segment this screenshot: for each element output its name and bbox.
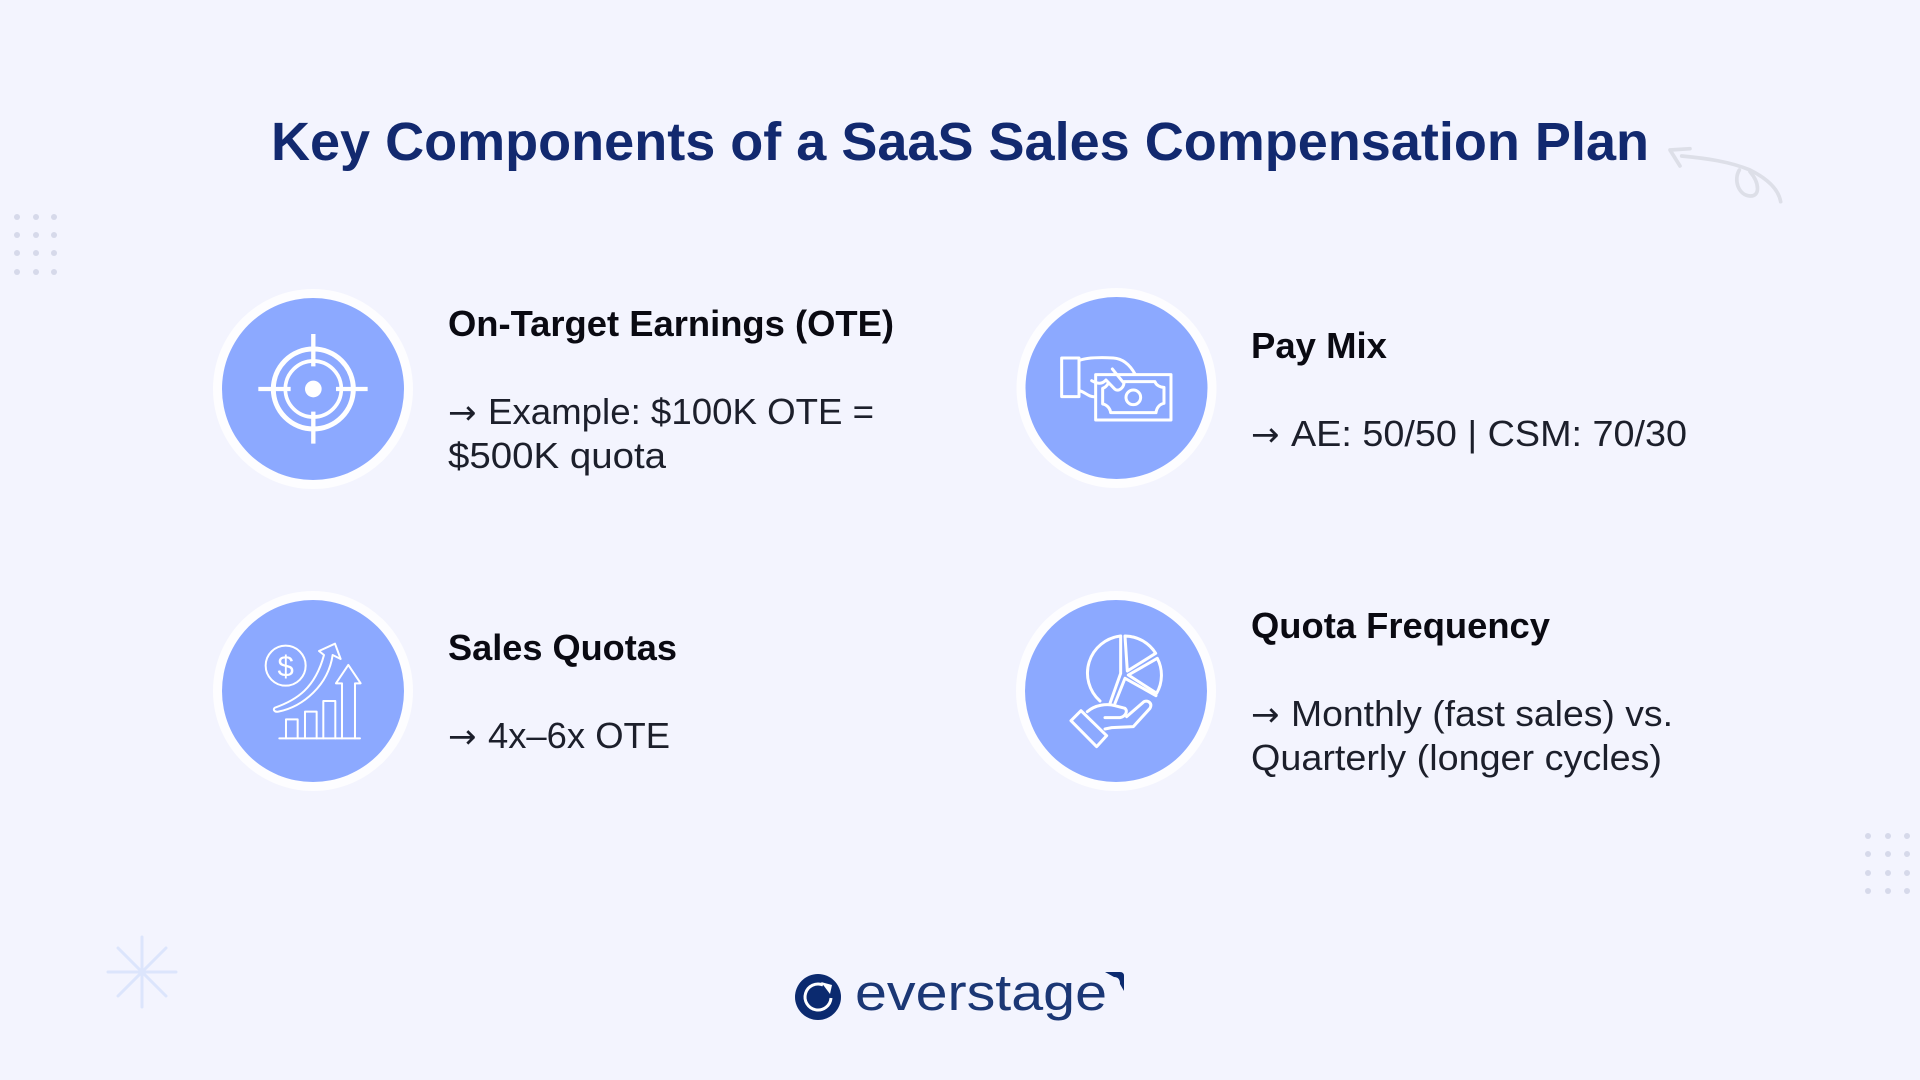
icon: hand with money	[1016, 288, 1216, 488]
text: quota multiple: 4x–6x OTE	[488, 715, 670, 756]
logo corner mark	[1105, 972, 1124, 991]
text: quota multiple: →	[448, 717, 476, 757]
icon: hand holding pie chart	[1016, 591, 1216, 791]
logo: everstage	[795, 964, 1124, 1021]
icon: growth chart: $	[278, 650, 294, 683]
text: OTE example: $500K quota	[448, 435, 667, 476]
heading: OTE: On-Target Earnings (OTE)	[448, 303, 894, 344]
decorative dot grid left	[14, 214, 57, 275]
card: pay mix	[1016, 288, 1687, 488]
title: Key Components of a SaaS Sales Compensation Plan	[271, 112, 1649, 172]
card: quota frequency	[1016, 591, 1673, 791]
text: OTE example: →	[448, 393, 476, 433]
card: sales quotas	[213, 591, 677, 791]
text: pay mix ratios: AE: 50/50 | CSM: 70/30	[1291, 413, 1687, 454]
decorative dot grid right	[1865, 833, 1910, 894]
logo wordmark: everstage	[855, 964, 1107, 1021]
heading: pay mix: Pay Mix	[1251, 325, 1387, 366]
decorative squiggle arrow	[1670, 149, 1781, 202]
card: on-target earnings	[213, 289, 894, 489]
text: frequency options: Monthly (fast sales) vs.	[1291, 693, 1673, 734]
decorative asterisk star	[108, 937, 176, 1007]
text: pay mix ratios: →	[1251, 415, 1280, 455]
icon: target	[213, 289, 413, 489]
icon: logo mark	[795, 974, 841, 1020]
icon: growth chart	[213, 591, 413, 791]
text: frequency options: →	[1251, 695, 1280, 735]
heading: quota frequency: Quota Frequency	[1251, 605, 1550, 646]
text: OTE example: Example: $100K OTE =	[488, 391, 874, 432]
text: OTE example	[448, 391, 874, 476]
text: frequency options	[1251, 693, 1673, 778]
text: frequency options: Quarterly (longer cycles)	[1251, 737, 1662, 778]
heading: sales quotas: Sales Quotas	[448, 627, 677, 668]
